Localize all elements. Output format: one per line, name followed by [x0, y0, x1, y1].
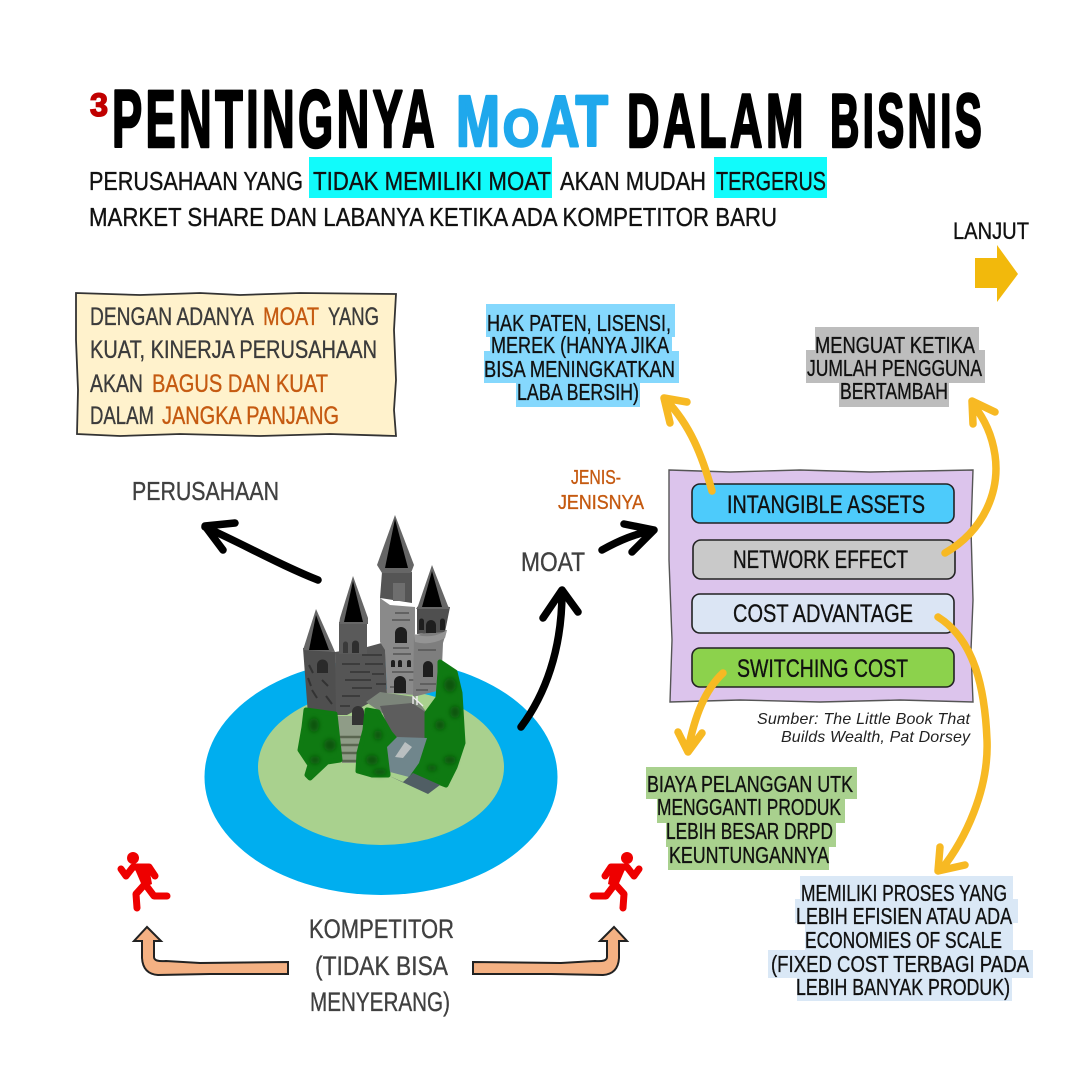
- panel: company note: YANG: [328, 303, 379, 331]
- arrow: switching cost to callout: [678, 673, 723, 752]
- callout: cost advantage: ECONOMIES OF SCALE: [805, 927, 1002, 953]
- icon: castle: [300, 515, 463, 794]
- label: jenis-jenisnya: JENIS-: [571, 467, 621, 489]
- label: jenis-jenisnya: [558, 467, 645, 514]
- rock and railing: [366, 692, 430, 740]
- icon: runner right: [593, 852, 639, 908]
- callout: switching cost: [646, 767, 857, 870]
- arrow: moat to types: [602, 524, 654, 552]
- title: 3: [90, 87, 108, 123]
- label: competitor: [309, 914, 454, 1017]
- callout: network effect: MENGUAT KETIKA: [815, 332, 975, 358]
- item: cost advantage: COST ADVANTAGE: [733, 600, 913, 628]
- right tower: [413, 565, 450, 697]
- title: O: [503, 100, 539, 158]
- item: intangible assets: [692, 484, 954, 523]
- waterfall rock: [387, 737, 440, 794]
- panel: company note: DENGAN ADANYA: [90, 303, 254, 331]
- wall: [335, 642, 387, 715]
- label: competitor: KOMPETITOR: [309, 914, 454, 944]
- source note: Sumber: The Little Book That: [757, 711, 971, 728]
- arrow: competitor left: [134, 927, 288, 975]
- callout: intangible assets: HAK PATEN, LISENSI,: [487, 310, 671, 336]
- callout: switching cost: MENGGANTI PRODUK: [657, 794, 841, 820]
- arrow: competitor right: [473, 927, 627, 975]
- island with moat: [204, 659, 558, 895]
- subtitle: TIDAK MEMILIKI MOAT: [313, 166, 551, 196]
- main tower body: [380, 598, 415, 695]
- subtitle: [89, 157, 827, 232]
- middle tower: [339, 576, 368, 654]
- arrow: castle to perusahaan: [205, 523, 318, 580]
- icon: runner left: [121, 852, 167, 908]
- subtitle: MARKET SHARE DAN LABANYA KETIKA ADA KOMPETITOR BARU: [89, 202, 777, 232]
- callout: intangible assets: MEREK (HANYA JIKA: [491, 332, 669, 358]
- item: cost advantage: [692, 594, 954, 633]
- arrow: network effect to callout: [945, 401, 996, 553]
- subtitle: TERGERUS: [716, 166, 826, 196]
- subtitle: PERUSAHAAN YANG: [89, 166, 303, 196]
- callout: intangible assets: BISA MENINGKATKAN: [484, 356, 675, 382]
- callout: cost advantage: MEMILIKI PROSES YANG: [801, 880, 1007, 906]
- callout: cost advantage: [768, 876, 1033, 1001]
- callout: network effect: BERTAMBAH: [840, 378, 948, 404]
- source note: Builds Wealth, Pat Dorsey: [781, 729, 971, 746]
- title: PENTINGNYA: [112, 74, 438, 165]
- callout: cost advantage: LEBIH BANYAK PRODUK): [796, 974, 1010, 1000]
- item: switching cost: SWITCHING COST: [737, 655, 908, 683]
- next label and arrow: LANJUT: [953, 218, 1029, 245]
- item: network effect: [693, 540, 955, 579]
- title: M: [456, 82, 500, 162]
- callout: switching cost: LEBIH BESAR DRPD: [666, 818, 833, 844]
- subtitle: AKAN MUDAH: [560, 166, 706, 196]
- title: AT: [541, 82, 608, 162]
- item: network effect: NETWORK EFFECT: [733, 546, 908, 574]
- label: competitor: (TIDAK BISA: [315, 951, 448, 981]
- callout: cost advantage: LEBIH EFISIEN ATAU ADA: [796, 903, 1012, 929]
- label: perusahaan: PERUSAHAAN: [132, 476, 279, 506]
- arrow: cost advantage to callout: [938, 617, 987, 871]
- panel: company note: KUAT, KINERJA PERUSAHAAN: [90, 336, 377, 364]
- panel: company note: DALAM: [90, 402, 154, 430]
- panel: company note: JANGKA PANJANG: [162, 402, 339, 430]
- arrow: intangible assets to callout: [664, 398, 712, 491]
- main tower upper: [377, 515, 414, 603]
- label: competitor: MENYERANG): [310, 987, 450, 1017]
- item: switching cost: [692, 648, 954, 687]
- callout: switching cost: KEUNTUNGANNYA: [669, 842, 829, 868]
- panel: company note: MOAT: [263, 303, 319, 331]
- next label and arrow: [953, 218, 1029, 302]
- foliage: [300, 662, 463, 785]
- title: DALAM: [627, 79, 807, 164]
- left tower: [303, 609, 337, 715]
- panel: company note: [76, 293, 396, 436]
- panel: company note: BAGUS DAN KUAT: [152, 370, 328, 398]
- label: moat: MOAT: [521, 547, 585, 577]
- label: jenis-jenisnya: JENISNYA: [558, 492, 645, 514]
- source note: [757, 711, 971, 746]
- callout: intangible assets: LABA BERSIH): [517, 379, 639, 405]
- title: [90, 74, 985, 165]
- arrow: moat to label: [521, 590, 578, 727]
- panel: types of moat: [669, 470, 973, 702]
- callout: switching cost: BIAYA PELANGGAN UTK: [647, 771, 853, 797]
- callout: intangible assets: [484, 304, 679, 407]
- callout: network effect: JUMLAH PENGGUNA: [807, 355, 982, 381]
- stairs: [337, 706, 368, 763]
- item: intangible assets: INTANGIBLE ASSETS: [727, 491, 925, 519]
- panel: company note: AKAN: [90, 370, 143, 398]
- callout: network effect: [806, 327, 985, 407]
